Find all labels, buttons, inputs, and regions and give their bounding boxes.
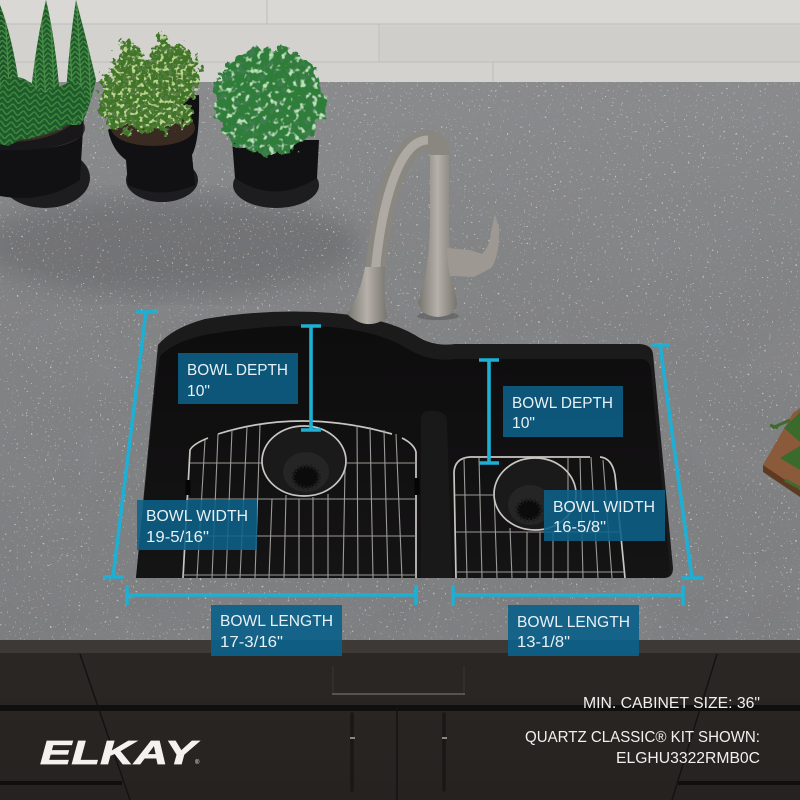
label: bowl depth left (178, 353, 298, 404)
left drain (262, 426, 346, 496)
label: bowl width right: 16-5/8" (553, 519, 606, 536)
faucet spout cone (347, 267, 387, 324)
sink basin (136, 326, 670, 578)
label: bowl width right: BOWL WIDTH (553, 499, 655, 516)
label: bowl length right: BOWL LENGTH (517, 614, 630, 631)
drawer pull (332, 666, 465, 694)
floor planks (0, 0, 800, 82)
rack clips (188, 478, 417, 495)
label: bowl length left: BOWL LENGTH (220, 613, 333, 630)
bowl depth line right (479, 360, 499, 463)
door handles (352, 714, 444, 790)
text: cabinet size: MIN. CABINET SIZE: 36" (583, 695, 760, 712)
label: bowl length left (211, 605, 342, 656)
dimensions: right bowl (453, 345, 703, 656)
bowl length line right (453, 585, 683, 606)
overall depth line right (651, 345, 703, 578)
dimensions: left bowl (103, 311, 416, 656)
faucet body (418, 155, 457, 317)
faucet handle (447, 214, 499, 277)
label: bowl width left: BOWL WIDTH (146, 508, 248, 525)
rosemary sprigs (0, 0, 96, 146)
plant pot: rosemary (0, 0, 96, 208)
cutting board with herbs (763, 408, 800, 497)
logo: Elkay (40, 734, 200, 771)
label: bowl depth right: BOWL DEPTH (512, 395, 613, 412)
plant pot: parsley (100, 35, 199, 202)
logo: Elkay: ELKAY (40, 734, 200, 771)
left rack (182, 421, 416, 578)
label: bowl depth left: 10" (187, 383, 210, 400)
overall depth line (103, 311, 158, 577)
label: bowl width left: 19-5/16" (146, 529, 209, 546)
label: bowl length right: 13-1/8" (517, 634, 570, 651)
ball herb foliage (215, 47, 323, 155)
faucet (347, 140, 499, 324)
bowl divider (421, 411, 452, 578)
right drain (494, 458, 576, 530)
bowl depth line left (301, 326, 321, 430)
kitchen countertop (0, 82, 800, 650)
left drain ring (262, 426, 346, 496)
plant pot: ball herb (215, 47, 323, 208)
sink (136, 311, 673, 578)
bowl length line left (127, 585, 416, 605)
label: bowl depth right (503, 386, 623, 437)
label: bowl depth right: 10" (512, 415, 535, 432)
cabinets (0, 640, 800, 800)
label: bowl depth left: BOWL DEPTH (187, 362, 288, 379)
text: kit shown: QUARTZ CLASSIC® KIT SHOWN: (525, 729, 760, 746)
label: bowl width left (137, 500, 257, 550)
text: kit shown: ELGHU3322RMB0C (616, 750, 760, 767)
text: kit shown (525, 729, 760, 767)
label: bowl length right (508, 605, 639, 656)
sink rim (136, 311, 673, 578)
faucet spout (375, 140, 440, 275)
label: bowl length left: 17-3/16" (220, 634, 283, 651)
parsley foliage (100, 35, 199, 132)
right drain ring (494, 458, 576, 530)
label: bowl width right (544, 490, 665, 541)
logo: Elkay: ® (195, 759, 200, 766)
right rack (454, 457, 625, 578)
